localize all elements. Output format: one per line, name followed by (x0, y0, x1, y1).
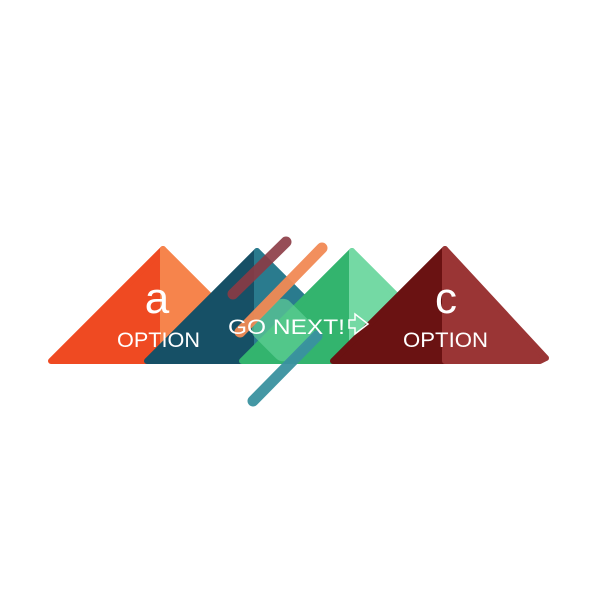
panel: triangle c (maroon) (333, 249, 546, 361)
panel: triangle a (orange) (51, 249, 275, 361)
text: c option: OPTION (403, 329, 488, 352)
text: go next (228, 314, 368, 339)
text: c option: c (435, 274, 457, 323)
panel: triangle green (242, 251, 462, 361)
text: a option (117, 274, 200, 352)
bar: maroon (233, 242, 286, 294)
text: a option: a (145, 274, 170, 323)
bar: teal (253, 336, 317, 401)
text: c option (403, 274, 488, 352)
bar: orange (240, 248, 322, 332)
decorative rounded square (248, 295, 318, 365)
panel: triangle b (teal) (147, 251, 367, 361)
icon: arrow (349, 314, 368, 334)
text: go next: GO NEXT! (228, 316, 345, 339)
text: a option: OPTION (117, 329, 200, 352)
